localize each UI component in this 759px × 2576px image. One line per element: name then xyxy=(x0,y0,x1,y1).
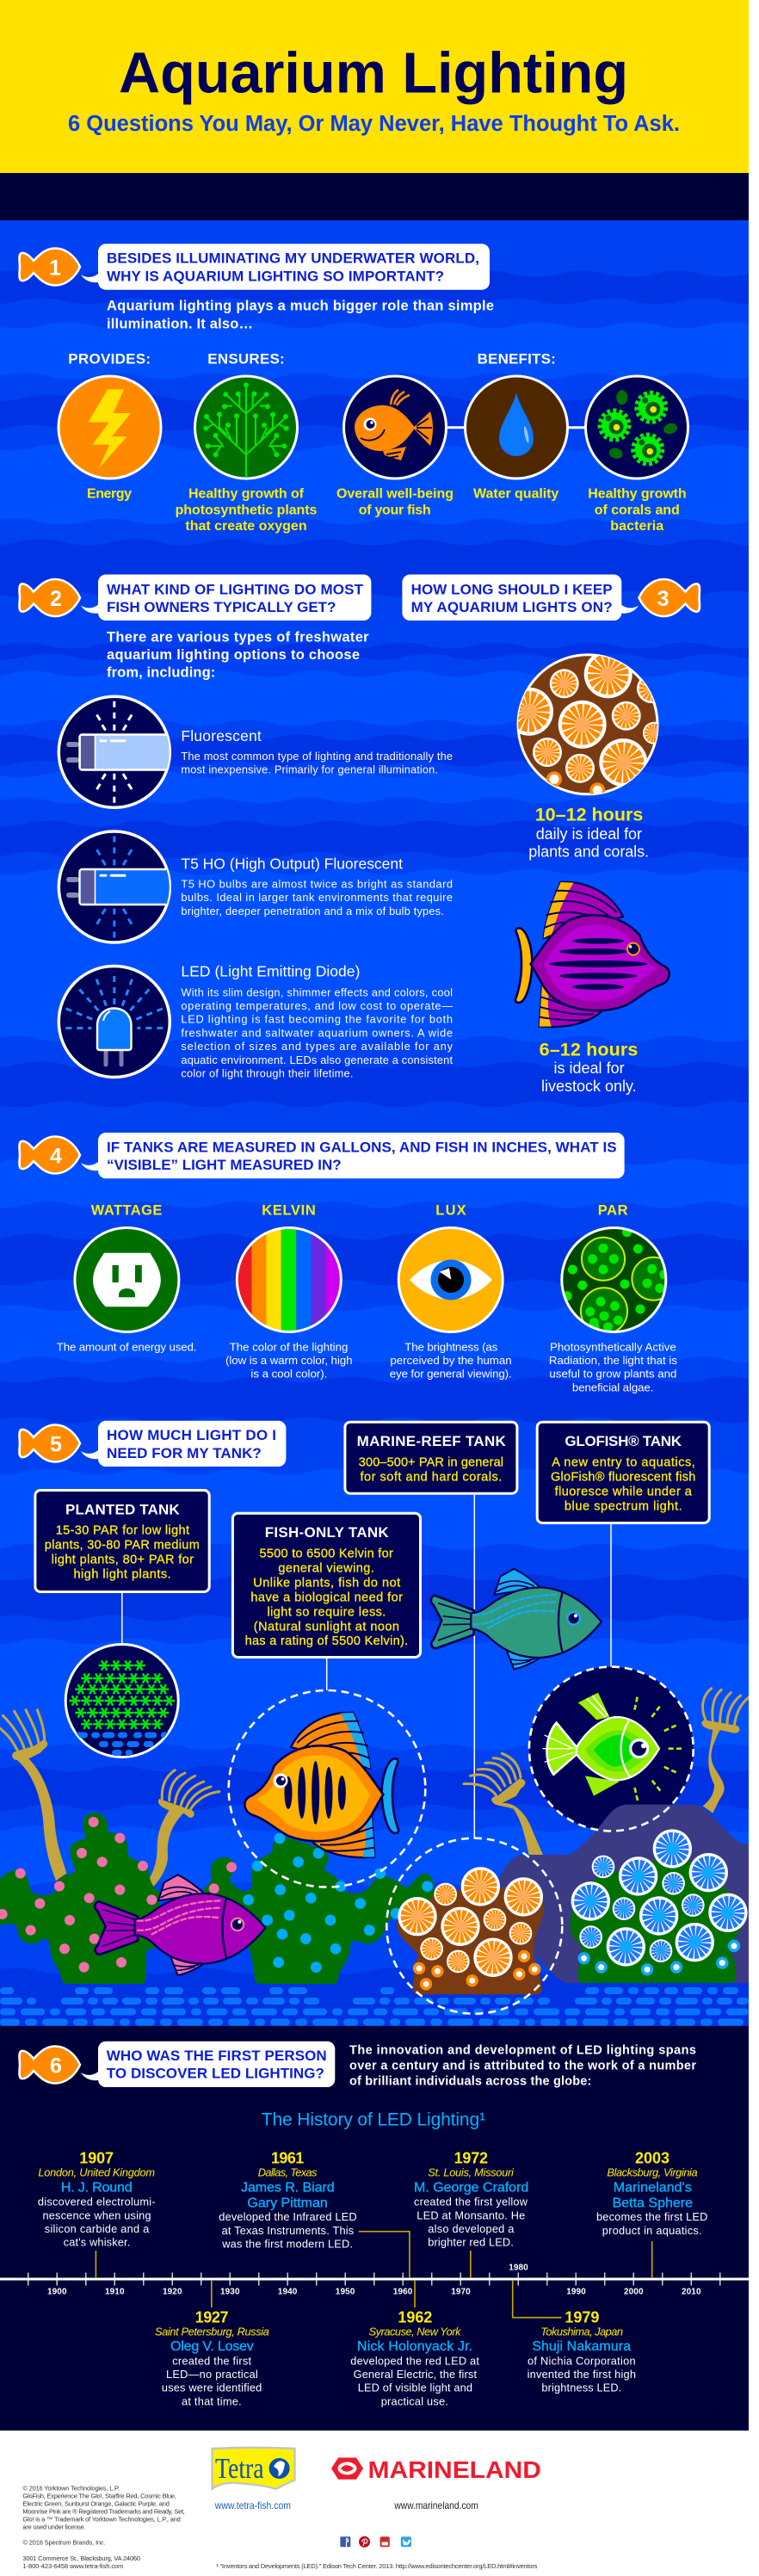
axis years: 1940 xyxy=(278,2288,298,2297)
stem 4 xyxy=(701,1689,750,1813)
captions: that create oxygen xyxy=(185,519,307,534)
badge 6: 6 xyxy=(50,2054,62,2078)
icon: plant tree xyxy=(194,376,298,479)
T5 HO text: brighter, deeper penetration and a mix of bulb types. xyxy=(181,905,444,917)
badge 2: 2 xyxy=(50,587,62,611)
question 3 bubble xyxy=(402,575,621,621)
axis years: 2000 xyxy=(624,2288,644,2297)
1962 entry: practical use. xyxy=(381,2395,448,2408)
intro text 2: from, including: xyxy=(107,665,215,681)
LED text xyxy=(181,963,454,1079)
intro text 6 xyxy=(349,2044,696,2089)
question 4 bubble: IF TANKS ARE MEASURED IN GALLONS, AND FISH IN INCHES, WHAT IS xyxy=(107,1140,617,1156)
question 6 bubble: TO DISCOVER LED LIGHTING? xyxy=(107,2066,324,2082)
axis years: 1990 xyxy=(566,2288,586,2297)
timeline heading: The History of LED Lighting¹ xyxy=(262,2110,485,2129)
section 6: history of LED xyxy=(0,2026,749,2431)
website links xyxy=(214,2499,478,2511)
measure captions: Radiation, the light that is xyxy=(549,1354,677,1367)
badge 3 xyxy=(621,579,700,616)
question 5 bubble xyxy=(98,1421,286,1467)
intro text 6: over a century and is attributed to the work of a number xyxy=(349,2060,696,2073)
1961 entry: at Texas Instruments. This xyxy=(222,2224,354,2237)
intro text 2: aquarium lighting options to choose xyxy=(107,647,360,663)
social icons xyxy=(340,2536,411,2548)
measure labels: KELVIN xyxy=(262,1203,316,1219)
measure captions: The color of the lighting xyxy=(230,1340,348,1353)
axis years: 1950 xyxy=(336,2288,355,2297)
captions: Water quality xyxy=(473,487,558,501)
legal text: © 2016 Yorktown Technologies, L.P. xyxy=(22,2484,120,2492)
fluorescent text: The most common type of lighting and traditionally the xyxy=(181,750,453,763)
measure captions: eye for general viewing). xyxy=(390,1368,512,1381)
question 3 bubble: MY AQUARIUM LIGHTS ON? xyxy=(411,599,613,615)
footer xyxy=(0,2431,759,2576)
question 5 bubble: HOW MUCH LIGHT DO I xyxy=(107,1427,276,1443)
measure labels xyxy=(91,1203,628,1219)
box: marine-reef tank xyxy=(345,1422,517,1493)
1961 entry: Gary Pittman xyxy=(247,2196,328,2211)
measure captions: useful to grow plants and xyxy=(549,1368,676,1381)
plants and corals text: plants and corals. xyxy=(528,843,649,861)
question 1 bubble xyxy=(98,244,490,290)
plants and corals text: daily is ideal for xyxy=(536,825,642,843)
2003 entry xyxy=(596,2150,707,2237)
orange disc fish xyxy=(244,1713,398,1857)
column labels: ENSURES: xyxy=(207,350,285,367)
1961 entry: James R. Biard xyxy=(241,2180,335,2195)
measure captions: Photosynthetically Active xyxy=(550,1340,676,1353)
T5 HO text: bulbs. Ideal in larger tank environments that require xyxy=(181,891,453,904)
livestock text: is ideal for xyxy=(554,1059,625,1077)
connectors xyxy=(395,426,637,429)
1972 entry xyxy=(414,2150,528,2249)
teal fish xyxy=(431,1569,602,1669)
1961 entry: Dallas, Texas xyxy=(258,2165,318,2178)
icon: fluorescent bulb xyxy=(59,696,182,807)
legal text: 1-800-423-6458 www.tetra-fish.com xyxy=(22,2562,123,2570)
1907 entry: London, United Kingdom xyxy=(38,2165,155,2178)
1979 entry: of Nichia Corporation xyxy=(528,2354,636,2367)
box: glofish tank xyxy=(537,1422,709,1523)
1979 entry: Shuji Nakamura xyxy=(532,2339,631,2354)
captions: Healthy growth xyxy=(588,487,687,501)
1961 entry: 1961 xyxy=(271,2150,304,2167)
1927 entry xyxy=(155,2308,269,2408)
section 5: scene and tank boxes xyxy=(0,1421,750,2023)
badge 6 xyxy=(19,2047,98,2083)
blue polyp coral xyxy=(570,1829,748,1983)
axis years: 1970 xyxy=(451,2288,471,2297)
1979 entry xyxy=(528,2308,636,2394)
axis years: 1910 xyxy=(105,2288,125,2297)
legal text xyxy=(22,2484,185,2570)
box: fish-only tank: general viewing. xyxy=(278,1561,374,1575)
box: planted tank: light plants, 80+ PAR for xyxy=(52,1554,194,1567)
1907 entry: H. J. Round xyxy=(61,2180,133,2195)
intro text 6: of brilliant individuals across the globe: xyxy=(349,2075,591,2089)
column labels xyxy=(68,350,556,367)
header panel xyxy=(0,0,749,220)
captions: of your fish xyxy=(359,503,431,518)
measure captions: (low is a warm color, high xyxy=(225,1354,353,1367)
measure captions: The brightness (as xyxy=(404,1340,498,1353)
right kelp stems xyxy=(464,1689,750,1856)
1972 entry: brighter red LED. xyxy=(428,2236,514,2249)
LED text: aquatic environment. LEDs also generate a consistent xyxy=(181,1053,453,1066)
measure captions: is a cool color). xyxy=(250,1368,327,1381)
captions: photosynthetic plants xyxy=(176,503,317,518)
measure captions: beneficial algae. xyxy=(572,1381,653,1393)
box: fish-only tank: FISH-ONLY TANK xyxy=(265,1524,389,1541)
captions: Overall well-being xyxy=(336,487,454,501)
section 4: measures of light xyxy=(19,1133,677,1393)
axis years: 1960 xyxy=(393,2288,413,2297)
fluorescent text: most inexpensive. Primarily for general illumination. xyxy=(181,763,438,776)
1972 entry: also developed a xyxy=(428,2222,515,2235)
1927 entry: 1927 xyxy=(195,2308,229,2326)
1972 entry: created the first yellow xyxy=(414,2195,528,2208)
icon: colour spectrum xyxy=(236,1226,342,1334)
1907 entry: cat's whisker. xyxy=(64,2236,130,2249)
logo: Tetra: Tetra xyxy=(215,2453,264,2485)
LED text: selection of sizes and types are available for any xyxy=(181,1040,454,1053)
1979 entry: 1979 xyxy=(565,2308,599,2326)
legal text: Moonrise Pink are ® Registered Trademarks and Ready, Set, xyxy=(22,2507,185,2515)
stem 2 xyxy=(148,1770,219,1888)
rock xyxy=(497,1805,749,1983)
badge 3: 3 xyxy=(657,587,670,611)
badge 2 xyxy=(19,579,98,616)
LED text: LED lighting is fast becoming the favorite for both xyxy=(181,1013,453,1026)
badge 1 xyxy=(19,248,98,286)
gravel xyxy=(3,1991,745,2023)
badge 4 xyxy=(19,1136,98,1174)
box: fish-only tank: (Natural sunlight at noon xyxy=(254,1620,399,1634)
2003 entry: Blacksburg, Virginia xyxy=(607,2165,698,2178)
legal text: GloFish, Experience The Glo!, Starfire Red, Cosmic Blue, xyxy=(22,2492,176,2499)
badge 5: 5 xyxy=(50,1432,62,1456)
website links: www.marineland.com xyxy=(394,2499,478,2511)
stem 3 xyxy=(464,1753,544,1856)
intro text 1 xyxy=(107,299,494,331)
box: planted tank: high light plants. xyxy=(74,1568,171,1582)
1907 entry: nescence when using xyxy=(43,2208,151,2221)
1961 entry: was the first modern LED. xyxy=(221,2238,353,2251)
2003 entry: 2003 xyxy=(635,2150,670,2167)
intro text 1: illumination. It also… xyxy=(107,316,253,331)
box: glofish tank: blue spectrum light. xyxy=(565,1499,682,1513)
icon: goldfish xyxy=(344,376,446,479)
axis years: 1920 xyxy=(163,2288,182,2297)
1962 entry: developed the red LED at xyxy=(350,2354,479,2367)
icon: algae cells xyxy=(559,1226,675,1334)
legal text: 3001 Commerce St., Blacksburg, VA 24060 xyxy=(22,2554,140,2562)
fluorescent text: Fluorescent xyxy=(181,727,262,744)
question 3 bubble: HOW LONG SHOULD I KEEP xyxy=(411,582,613,598)
1979 entry: Tokushima, Japan xyxy=(540,2325,623,2338)
2003 entry: product in aquatics. xyxy=(602,2224,702,2237)
icon: LED xyxy=(59,966,170,1078)
fluorescent text xyxy=(181,727,453,776)
measure labels: WATTAGE xyxy=(91,1203,162,1219)
2003 entry: becomes the first LED xyxy=(596,2210,707,2223)
question 6 bubble: WHO WAS THE FIRST PERSON xyxy=(107,2048,327,2064)
box: planted tank: 15-30 PAR for low light xyxy=(56,1524,189,1538)
title: Aquarium Lighting xyxy=(119,41,628,105)
orange fish stripes and eye xyxy=(274,1761,346,1825)
box: fish-only tank: light so require less. xyxy=(267,1605,386,1619)
T5 HO text: T5 HO bulbs are almost twice as bright as standard xyxy=(181,878,453,891)
box: marine-reef tank: for soft and hard corals. xyxy=(360,1470,502,1484)
logo: Marineland: MARINELAND xyxy=(368,2456,541,2483)
measure captions: perceived by the human xyxy=(390,1354,512,1367)
LED text: color of light through their lifetime. xyxy=(181,1066,353,1079)
2003 entry: Betta Sphere xyxy=(613,2196,693,2211)
question 2 bubble xyxy=(98,575,371,621)
box: glofish tank: GloFish® fluorescent fish xyxy=(551,1470,695,1484)
blue-dot coral xyxy=(226,1833,435,1984)
section 1: why lighting matters xyxy=(19,244,688,534)
footnote: ¹ “Inventors and Developments (LED).” Edison Tech Center. 2013. http://www.edisontechcenter.org/LED.html#inventors xyxy=(216,2562,538,2570)
LED text: freshwater and saltwater aquarium owners. A wide xyxy=(181,1027,453,1040)
box: fish-only tank: have a biological need for xyxy=(250,1591,403,1604)
question 6 bubble xyxy=(98,2042,335,2087)
question 2 bubble: WHAT KIND OF LIGHTING DO MOST xyxy=(107,582,364,598)
1927 entry: at that time. xyxy=(182,2395,242,2408)
1907 entry xyxy=(38,2150,156,2249)
box: glofish tank: GLOFISH® TANK xyxy=(565,1433,682,1449)
LED text: LED (Light Emitting Diode) xyxy=(181,963,360,980)
1979 entry: brightness LED. xyxy=(541,2381,621,2394)
logo: Tetra xyxy=(212,2448,294,2489)
axis years: 1980 xyxy=(509,2264,528,2273)
1972 entry: 1972 xyxy=(454,2150,488,2167)
plants and corals text: 10–12 hours xyxy=(535,804,643,825)
livestock text: livestock only. xyxy=(541,1078,637,1095)
1962 entry: Syracuse, New York xyxy=(369,2325,461,2338)
question 1 bubble: BESIDES ILLUMINATING MY UNDERWATER WORLD, xyxy=(107,250,479,267)
box: marine-reef tank: MARINE-REEF TANK xyxy=(357,1433,507,1449)
box: marine-reef tank: 300–500+ PAR in general xyxy=(359,1455,503,1469)
coral circle xyxy=(516,653,659,795)
purple disc fish xyxy=(515,882,670,1027)
measure labels: PAR xyxy=(598,1203,628,1219)
2003 entry: Marineland's xyxy=(614,2180,692,2195)
box: planted tank: plants, 30-80 PAR medium xyxy=(45,1539,200,1553)
measure labels: LUX xyxy=(435,1203,466,1219)
intro text 2: There are various types of freshwater xyxy=(107,629,369,645)
measure captions: The amount of energy used. xyxy=(57,1340,196,1353)
icon: bacteria gears xyxy=(585,376,688,479)
column labels: BENEFITS: xyxy=(478,350,556,367)
column labels: PROVIDES: xyxy=(68,350,151,367)
box: fish-only tank: Unlike plants, fish do not xyxy=(253,1576,400,1590)
question 5 bubble: NEED FOR MY TANK? xyxy=(107,1445,262,1461)
T5 HO text: T5 HO (High Output) Fluorescent xyxy=(181,855,403,872)
timeline axis xyxy=(0,2232,749,2318)
pink coral xyxy=(0,1813,252,1984)
axis years: 1900 xyxy=(47,2288,67,2297)
planted-tank spotlight xyxy=(65,1644,178,1757)
captions xyxy=(87,487,687,534)
badge 4: 4 xyxy=(50,1144,62,1168)
orange polyp coral xyxy=(397,1867,544,1994)
captions: Healthy growth of xyxy=(188,487,305,501)
captions: bacteria xyxy=(610,519,663,534)
1927 entry: uses were identified xyxy=(162,2381,262,2394)
axis years: 1930 xyxy=(220,2288,240,2297)
section 3: how long xyxy=(402,575,700,1095)
box: glofish tank: A new entry to aquatics, xyxy=(552,1455,695,1469)
1979 entry: invented the first high xyxy=(528,2368,636,2381)
1907 entry: silicon carbide and a xyxy=(45,2222,150,2235)
box: planted tank xyxy=(35,1491,209,1592)
section 2: types of lighting xyxy=(19,575,454,1079)
glofish xyxy=(543,1693,682,1801)
badge 1: 1 xyxy=(49,256,61,280)
legal text: Electric Green, Sunburst Orange, Galactic Purple, and xyxy=(22,2499,170,2507)
icon: energy bolt xyxy=(59,376,161,479)
box: planted tank: PLANTED TANK xyxy=(65,1501,180,1517)
axis years: 2010 xyxy=(682,2288,701,2297)
badge 5 xyxy=(19,1425,98,1461)
kelp stems xyxy=(0,1710,219,1888)
box: fish-only tank xyxy=(232,1513,420,1658)
legal text: © 2016 Spectrum Brands, Inc. xyxy=(22,2539,106,2547)
icon: outlet xyxy=(75,1227,179,1332)
subtitle: 6 Questions You May, Or May Never, Have Thought To Ask. xyxy=(68,112,680,136)
question 2 bubble: FISH OWNERS TYPICALLY GET? xyxy=(107,599,336,615)
box: glofish tank: fluoresce while under a xyxy=(555,1485,693,1498)
question 1 bubble: WHY IS AQUARIUM LIGHTING SO IMPORTANT? xyxy=(107,269,444,285)
glofish spotlight circle xyxy=(529,1667,694,1831)
axis years xyxy=(47,2264,701,2297)
T5 HO text xyxy=(181,855,453,917)
1907 entry: 1907 xyxy=(79,2150,114,2167)
1961 entry xyxy=(219,2150,357,2251)
1927 entry: LED—no practical xyxy=(166,2368,258,2381)
intro text 6: The innovation and development of LED lighting spans xyxy=(349,2044,696,2058)
1962 entry: LED of visible light and xyxy=(358,2381,472,2394)
livestock text xyxy=(540,1040,638,1095)
dashed spotlight circles xyxy=(229,1667,694,2014)
1927 entry: Oleg V. Losev xyxy=(170,2339,254,2354)
icon: T5 HO bulb xyxy=(59,831,182,942)
plants and corals text xyxy=(528,804,649,861)
stem 1 xyxy=(0,1710,66,1881)
1927 entry: created the first xyxy=(172,2354,251,2367)
icon: eye xyxy=(398,1227,503,1332)
background: wavy water xyxy=(0,220,759,2229)
LED text: With its slim design, shimmer effects and colors, cool xyxy=(181,986,453,998)
box: fish-only tank: has a rating of 5500 Kelvin). xyxy=(245,1634,408,1648)
1962 entry: General Electric, the first xyxy=(354,2368,477,2381)
question 4 bubble: “VISIBLE” LIGHT MEASURED IN? xyxy=(107,1157,342,1173)
legal text: are used under license. xyxy=(22,2523,86,2531)
icon: water drop xyxy=(465,376,568,479)
purple fish in scene xyxy=(95,1875,265,1975)
1927 entry: Saint Petersburg, Russia xyxy=(155,2325,269,2338)
1962 entry xyxy=(350,2308,479,2408)
1961 entry: developed the Infrared LED xyxy=(219,2210,357,2223)
1972 entry: St. Louis, Missouri xyxy=(428,2165,515,2178)
LED text: operating temperatures, and low cost to operate— xyxy=(181,999,453,1012)
captions: Energy xyxy=(87,487,132,501)
1962 entry: 1962 xyxy=(398,2308,432,2326)
captions: of corals and xyxy=(595,503,680,518)
1972 entry: LED at Monsanto. He xyxy=(417,2208,525,2221)
intro text 1: Aquarium lighting plays a much bigger role than simple xyxy=(107,299,494,314)
1962 entry: Nick Holonyack Jr. xyxy=(357,2339,472,2354)
box: fish-only tank: 5500 to 6500 Kelvin for xyxy=(260,1547,393,1560)
leader lines xyxy=(122,1495,611,1838)
intro text 2 xyxy=(107,629,369,681)
question 4 bubble xyxy=(98,1133,625,1178)
1972 entry: M. George Craford xyxy=(414,2180,528,2195)
legal text: Glo! is a ™ Trademark of Yorktown Technologies, L.P., and xyxy=(22,2515,181,2523)
website links: www.tetra-fish.com xyxy=(214,2499,291,2511)
1907 entry: discovered electrolumi- xyxy=(38,2195,156,2208)
livestock text: 6–12 hours xyxy=(540,1040,638,1060)
measure captions xyxy=(57,1340,677,1393)
